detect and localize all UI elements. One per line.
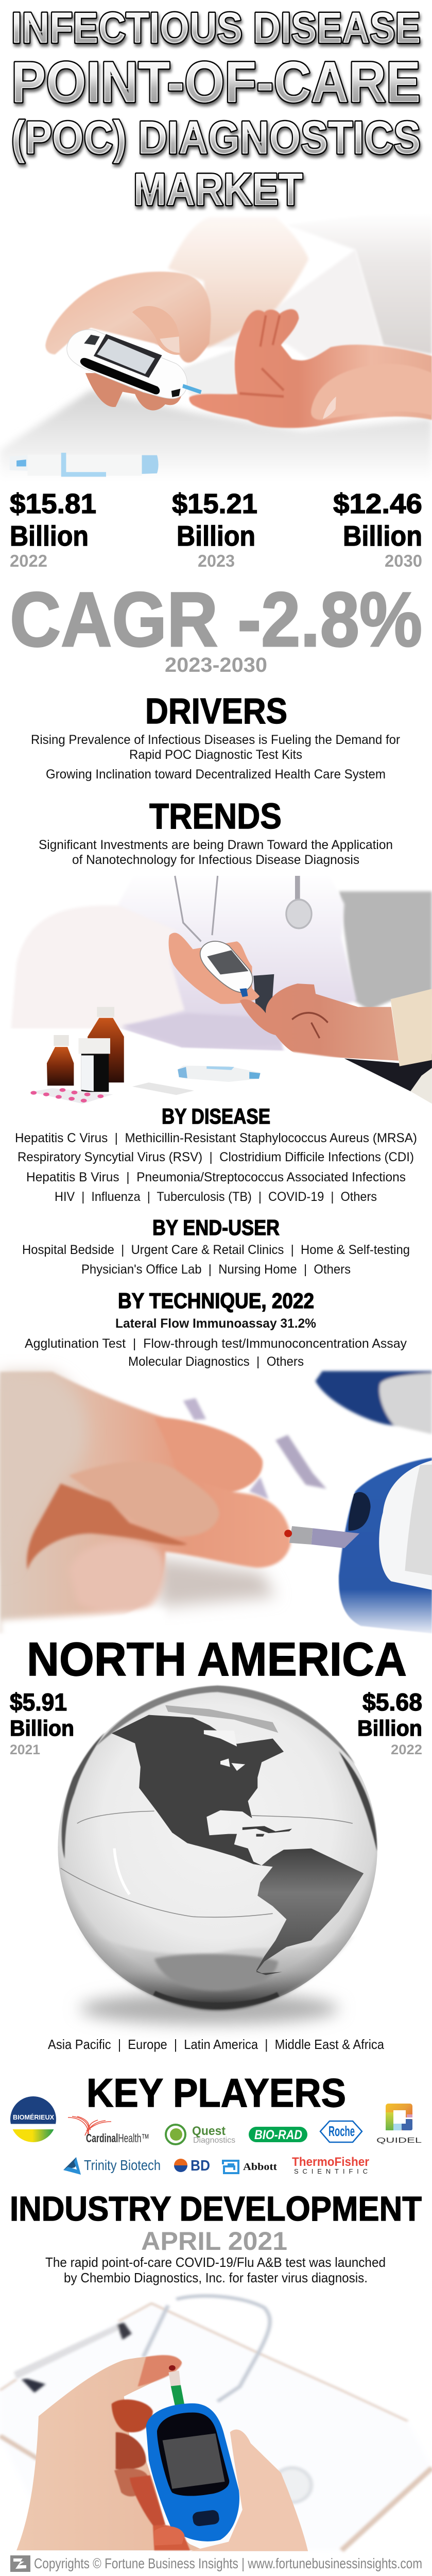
doctor coat bbox=[118, 873, 357, 1052]
sheet shadow bbox=[210, 250, 383, 359]
other regions: Asia Pacific | Europe | Latin America | Middle East & Africa bbox=[48, 2037, 384, 2052]
forearm bbox=[168, 217, 308, 348]
value 2023 bbox=[172, 488, 257, 570]
logo: Bio-Rad: BIO-RAD bbox=[254, 2128, 302, 2142]
title: MARKET bbox=[133, 164, 303, 215]
nail bbox=[323, 397, 336, 419]
market size values bbox=[10, 488, 422, 570]
logo: Trinity Biotech: Trinity Biotech bbox=[84, 2157, 161, 2173]
right hand bbox=[190, 2430, 308, 2551]
lancet bbox=[10, 453, 159, 477]
value 2021: Billion bbox=[10, 1716, 74, 1741]
logo: Roche bbox=[320, 2121, 362, 2142]
thumbnail bbox=[160, 336, 180, 353]
logo: Quest Diagnostics: Quest bbox=[192, 2124, 226, 2138]
equator lines bbox=[61, 1811, 353, 1917]
brown bottle bbox=[88, 1007, 124, 1082]
logo: Roche: Roche bbox=[329, 2123, 355, 2139]
trends: Significant Investments are being Drawn Toward the Application bbox=[39, 838, 393, 852]
logo: bioMerieux: BIOMÉRIEUX bbox=[13, 2113, 54, 2121]
CAGR: 2023-2030 bbox=[165, 654, 267, 676]
by disease: BY DISEASE bbox=[162, 1104, 270, 1128]
pills blister bbox=[30, 1088, 113, 1104]
by disease bbox=[15, 1104, 417, 1204]
logo: Thermo Fisher Scientific: SCIENTIFIC bbox=[294, 2167, 368, 2175]
value 2022: $15.81 bbox=[10, 488, 96, 519]
value 2021: 2021 bbox=[10, 1742, 40, 1757]
footer logo bbox=[10, 2555, 30, 2572]
grey sofa bbox=[339, 891, 432, 1010]
left edge bbox=[62, 1733, 105, 1859]
value 2022: 2022 bbox=[10, 551, 47, 570]
pale back of hand bbox=[0, 1373, 87, 1570]
logo: Abbott bbox=[223, 2161, 277, 2173]
logo: bioMerieux bbox=[10, 2096, 56, 2143]
top meter bbox=[316, 1371, 432, 1434]
trends: TRENDS bbox=[149, 796, 282, 836]
hudson bay bbox=[204, 1730, 237, 1747]
dark shirt bbox=[253, 974, 274, 1013]
by end-user: BY END-USER bbox=[152, 1215, 280, 1240]
blood drop bbox=[169, 2365, 176, 2370]
title bbox=[11, 4, 421, 215]
logo: BD: BD bbox=[191, 2158, 210, 2174]
value 2021: $5.91 bbox=[10, 1688, 67, 1716]
by disease: Hepatitis B Virus | Pneumonia/Streptococcus Associated Infections bbox=[26, 1170, 406, 1184]
by end-user bbox=[22, 1215, 410, 1277]
industry development: The rapid point-of-care COVID-19/Flu A&B test was launched bbox=[45, 2255, 386, 2270]
value 2022: $5.68 bbox=[362, 1688, 422, 1716]
key players heading: KEY PLAYERS bbox=[87, 2070, 346, 2115]
photo: hands using glucose meter bbox=[0, 212, 432, 481]
logo: Quest Diagnostics: Diagnostics bbox=[193, 2136, 235, 2145]
doctor hand bbox=[169, 933, 260, 1004]
small bottle bbox=[47, 1035, 74, 1086]
logo: Trinity Biotech bbox=[63, 2157, 161, 2175]
table shadow bbox=[0, 391, 432, 481]
value 2023: 2023 bbox=[198, 551, 235, 570]
by disease: Respiratory Syncytial Virus (RSV) | Clostridium Difficile Infections (CDI) bbox=[18, 1150, 414, 1164]
logo: Cardinal Health: CardinalHealth™ bbox=[86, 2131, 149, 2145]
south america land bbox=[256, 1849, 364, 1975]
blurred fingers bbox=[69, 1540, 165, 1613]
index finger bbox=[154, 1418, 262, 1491]
lens bbox=[154, 1954, 278, 1991]
photo: doctor testing patient bbox=[0, 873, 432, 1113]
thumb bbox=[132, 306, 181, 355]
table bbox=[0, 1029, 432, 1113]
industry development: by Chembio Diagnostics, Inc. for faster virus diagnosis. bbox=[64, 2270, 368, 2285]
globe bbox=[58, 1686, 377, 2024]
drivers: Rising Prevalence of Infectious Diseases is Fueling the Demand for bbox=[31, 733, 400, 747]
patient hand bbox=[239, 984, 399, 1061]
value 2021 bbox=[10, 1688, 74, 1757]
blood drop bbox=[284, 1530, 292, 1537]
test strip bbox=[168, 2370, 184, 2407]
lower glass bbox=[74, 1925, 355, 2010]
industry development bbox=[10, 2190, 422, 2285]
value 2022: 2022 bbox=[391, 1742, 422, 1757]
value 2023: $15.21 bbox=[172, 488, 257, 519]
coat fold bbox=[121, 1013, 281, 1047]
drivers: Growing Inclination toward Decentralized Health Care System bbox=[46, 767, 386, 782]
lower fingers bbox=[85, 373, 182, 411]
logo: BD bbox=[174, 2158, 210, 2174]
value 2030: $12.46 bbox=[333, 488, 422, 519]
stethoscope bbox=[143, 2296, 312, 2502]
garment bbox=[286, 212, 432, 354]
highlight bbox=[114, 1849, 129, 1894]
stethoscope bbox=[175, 876, 312, 941]
lower thumb bbox=[154, 2527, 184, 2546]
lower fingers bbox=[27, 1484, 187, 1570]
North America heading: NORTH AMERICA bbox=[27, 1633, 407, 1686]
logo: Quidel bbox=[376, 2104, 422, 2145]
right finger folds bbox=[239, 315, 284, 397]
value 2022 bbox=[10, 488, 96, 570]
by technique bbox=[25, 1289, 407, 1369]
logo: Quidel: QUIDEL bbox=[376, 2136, 422, 2145]
photo: finger blood test bbox=[0, 1371, 432, 1638]
by technique: Molecular Diagnostics | Others bbox=[128, 1354, 304, 1369]
fade bbox=[0, 1609, 165, 1638]
logo: Thermo Fisher Scientific bbox=[292, 2155, 369, 2175]
logo: Abbott: Abbott bbox=[243, 2161, 277, 2173]
value 2030: 2030 bbox=[385, 551, 422, 570]
left hand bbox=[45, 272, 211, 363]
right thumb bbox=[311, 364, 432, 420]
logo: Thermo Fisher Scientific: ThermoFisher bbox=[292, 2155, 369, 2169]
lower meter bbox=[339, 1458, 432, 1633]
dark lap bbox=[344, 1054, 432, 1091]
ground shadow bbox=[80, 1993, 339, 2024]
drivers: Rapid POC Diagnostic Test Kits bbox=[129, 748, 302, 762]
top edge bbox=[96, 1686, 355, 1764]
hand shadow bbox=[154, 1557, 275, 1607]
footer bbox=[10, 2555, 422, 2572]
by technique: Agglutination Test | Flow-through test/Immunoconcentration Assay bbox=[25, 1336, 407, 1351]
industry development: APRIL 2021 bbox=[141, 2227, 287, 2256]
value 2030: Billion bbox=[343, 520, 422, 552]
drivers: DRIVERS bbox=[145, 691, 287, 731]
base ring bbox=[154, 1993, 278, 2005]
fingertip bbox=[137, 2355, 182, 2386]
left hand bbox=[16, 2356, 204, 2550]
sweater cuff bbox=[391, 989, 432, 1066]
thumb bbox=[69, 1461, 219, 1537]
by disease: HIV | Influenza | Tuberculosis (TB) | COVID-19 | Others bbox=[55, 1190, 377, 1204]
trends bbox=[39, 796, 393, 867]
jar bbox=[78, 1038, 110, 1092]
drivers bbox=[31, 691, 400, 782]
test strip bbox=[182, 384, 202, 394]
by end-user: Hospital Bedside | Urgent Care & Retail Clinics | Home & Self-testing bbox=[22, 1243, 410, 1257]
arctic islands bbox=[165, 1705, 278, 1733]
test strips bbox=[183, 1398, 326, 1499]
surface shade bbox=[182, 350, 237, 397]
value 2022: Billion bbox=[10, 520, 89, 552]
value 2023: Billion bbox=[177, 520, 255, 552]
lancet bbox=[178, 1065, 261, 1082]
finger folds bbox=[292, 1013, 328, 1038]
value 2030 bbox=[333, 488, 422, 570]
by disease: Hepatitis C Virus | Methicillin-Resistant Staphylococcus Aureus (MRSA) bbox=[15, 1131, 417, 1145]
logo: Cardinal Health bbox=[68, 2116, 149, 2145]
by technique: Lateral Flow Immunoassay 31.2% bbox=[115, 1316, 316, 1331]
meter bbox=[67, 330, 187, 399]
right hand bbox=[189, 309, 432, 428]
great lakes bbox=[220, 1758, 245, 1771]
second blister bbox=[132, 1082, 194, 1095]
caribbean bbox=[243, 1826, 292, 1837]
by end-user: Physician's Office Lab | Nursing Home | Others bbox=[81, 1262, 351, 1277]
by technique: BY TECHNIQUE, 2022 bbox=[118, 1289, 314, 1313]
coat sleeve bbox=[11, 905, 184, 1029]
trends: of Nanotechnology for Infectious Disease Diagnosis bbox=[72, 853, 359, 867]
clipboard edges bbox=[0, 2303, 432, 2550]
big hand bbox=[0, 1372, 291, 1633]
blue meter bbox=[146, 2403, 239, 2541]
clipboard clip bbox=[14, 2323, 132, 2393]
meter bbox=[200, 941, 252, 997]
photo: hands with blue meter bbox=[0, 2296, 432, 2551]
logo: Quest Diagnostics bbox=[166, 2124, 235, 2145]
sphere bbox=[58, 1686, 377, 2009]
value 2022 bbox=[357, 1688, 422, 1757]
north america land bbox=[112, 1715, 284, 1866]
value 2022: Billion bbox=[357, 1716, 422, 1741]
right edge bbox=[339, 1751, 377, 1851]
clipboard surface bbox=[0, 2304, 432, 2550]
curled fingers bbox=[112, 2399, 190, 2550]
knee bbox=[410, 1068, 432, 1104]
strip bbox=[289, 1526, 359, 1548]
